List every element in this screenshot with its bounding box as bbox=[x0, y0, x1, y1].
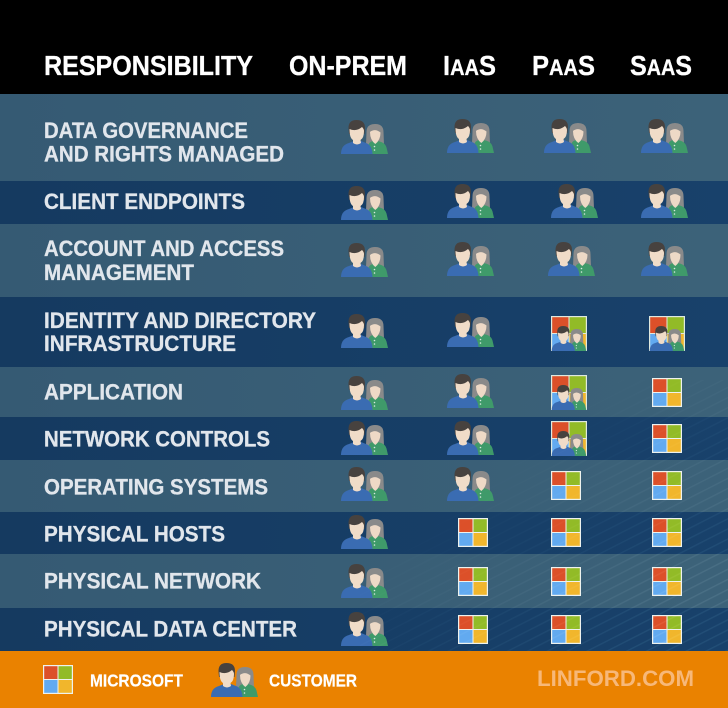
row: operating systems bbox=[0, 460, 728, 512]
row: identity and directory infrastructure bbox=[0, 297, 728, 367]
icon: customer bbox=[341, 314, 388, 348]
icon: shared bbox=[551, 421, 587, 456]
label: INFRASTRUCTURE bbox=[44, 331, 236, 356]
row: data governance bbox=[0, 94, 728, 181]
icon: customer bbox=[447, 313, 494, 347]
row: physical network bbox=[0, 554, 728, 608]
label: MANAGEMENT bbox=[44, 260, 195, 285]
label: CLIENT ENDPOINTS bbox=[44, 189, 245, 214]
icon: microsoft bbox=[458, 615, 488, 644]
icon: microsoft bbox=[458, 567, 488, 596]
legend icon: microsoft bbox=[43, 665, 73, 694]
icon: microsoft bbox=[652, 615, 682, 644]
icon: customer bbox=[447, 374, 494, 408]
icon: customer bbox=[641, 242, 688, 276]
icon: microsoft bbox=[551, 518, 581, 547]
icon: customer bbox=[447, 242, 494, 276]
label: OPERATING SYSTEMS bbox=[44, 474, 268, 500]
label: DATA GOVERNANCE bbox=[44, 118, 248, 143]
icon: customer bbox=[641, 184, 688, 218]
icon: shared bbox=[551, 375, 587, 410]
row: client endpoints bbox=[0, 181, 728, 224]
icon: customer bbox=[341, 467, 388, 501]
icon: microsoft bbox=[551, 567, 581, 596]
heading: responsibility: RESPONSIBILITY bbox=[44, 50, 253, 81]
footer legend bbox=[0, 651, 728, 708]
heading: SaaS: SAAS bbox=[630, 50, 692, 81]
brand: linford.com: LINFORD.COM bbox=[537, 666, 694, 691]
row: account and access management bbox=[0, 224, 728, 297]
legend icon: customer bbox=[211, 663, 258, 697]
icon: customer bbox=[341, 120, 388, 154]
icon: microsoft bbox=[652, 424, 682, 453]
icon: customer bbox=[447, 119, 494, 153]
label: AND RIGHTS MANAGED bbox=[44, 142, 284, 166]
heading: PaaS: PAAS bbox=[532, 50, 595, 81]
icon: customer bbox=[341, 564, 388, 598]
label: NETWORK CONTROLS bbox=[44, 426, 270, 452]
icon: microsoft bbox=[551, 615, 581, 644]
icon: microsoft bbox=[652, 378, 682, 407]
icon: shared bbox=[649, 316, 685, 351]
icon: customer bbox=[447, 467, 494, 501]
icon: microsoft bbox=[652, 518, 682, 547]
icon: customer bbox=[341, 376, 388, 410]
icon: customer bbox=[341, 612, 388, 646]
icon: customer bbox=[447, 184, 494, 218]
legend label: microsoft: MICROSOFT bbox=[90, 670, 183, 690]
label: PHYSICAL HOSTS bbox=[44, 522, 225, 546]
icon: customer bbox=[341, 186, 388, 220]
icon: customer bbox=[551, 184, 598, 218]
icon: customer bbox=[641, 119, 688, 153]
icon: microsoft bbox=[551, 471, 581, 500]
row: application bbox=[0, 367, 728, 417]
legend label: customer: CUSTOMER bbox=[269, 670, 357, 690]
icon: microsoft bbox=[458, 518, 488, 547]
icon: shared bbox=[551, 316, 587, 351]
row: physical data center bbox=[0, 608, 728, 651]
label: IDENTITY AND DIRECTORY bbox=[44, 308, 316, 333]
icon: customer bbox=[447, 421, 494, 455]
icon: customer bbox=[341, 243, 388, 277]
row: physical hosts bbox=[0, 512, 728, 554]
icon: customer bbox=[544, 119, 591, 153]
heading: IaaS: IAAS bbox=[443, 50, 496, 81]
icon: microsoft bbox=[652, 471, 682, 500]
icon: customer bbox=[341, 515, 388, 549]
icon: customer bbox=[548, 242, 595, 276]
heading: on-prem: ON-PREM bbox=[289, 50, 407, 81]
label: PHYSICAL NETWORK bbox=[44, 568, 261, 594]
label: PHYSICAL DATA CENTER bbox=[44, 616, 297, 642]
icon: microsoft bbox=[652, 567, 682, 596]
label: ACCOUNT AND ACCESS bbox=[44, 236, 284, 261]
icon: customer bbox=[341, 421, 388, 455]
label: APPLICATION bbox=[44, 380, 183, 404]
row: network controls bbox=[0, 417, 728, 460]
header row bbox=[44, 50, 692, 81]
